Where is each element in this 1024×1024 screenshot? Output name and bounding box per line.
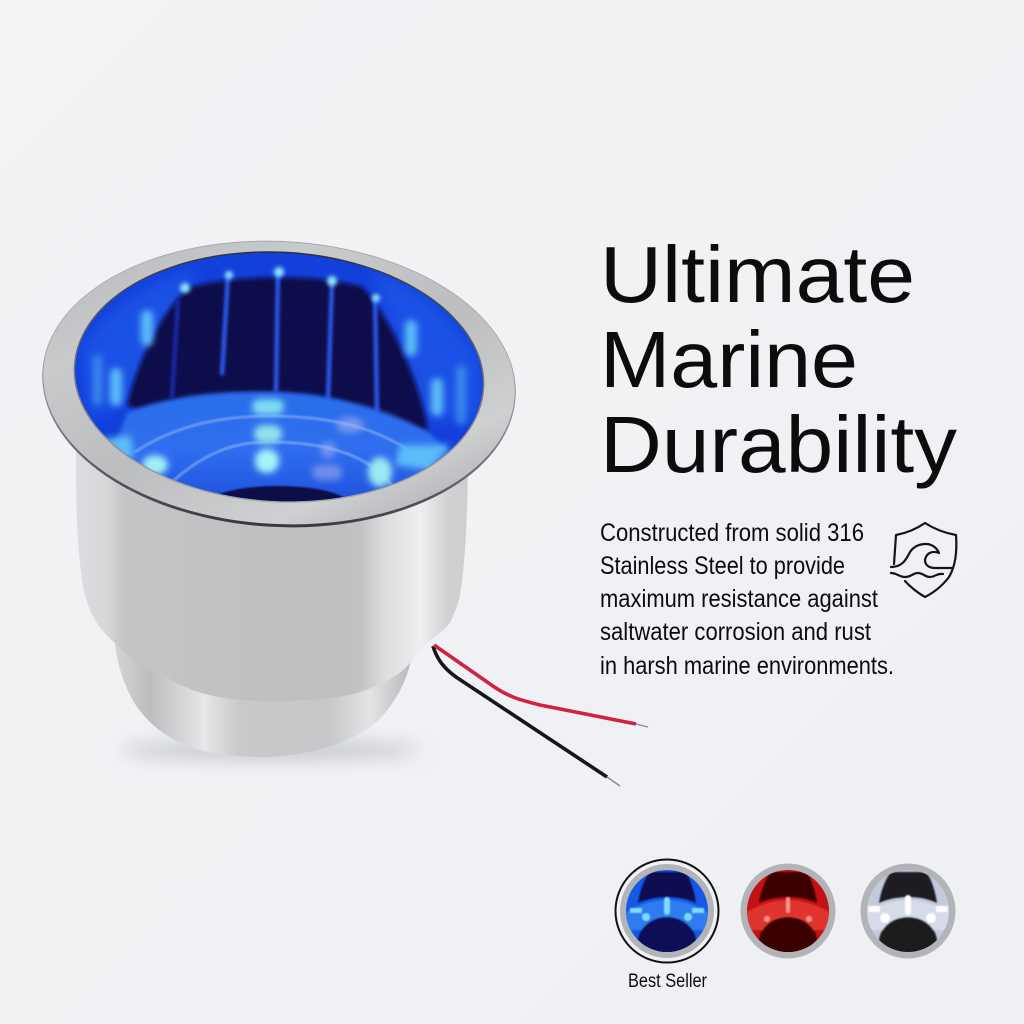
icon: shield with wave [891, 523, 956, 597]
infographic canvas [42, 240, 958, 987]
wire: red lead [434, 645, 648, 727]
LED glow spots [180, 267, 380, 302]
body copy: Constructed from solid 316 [600, 519, 864, 547]
body copy: maximum resistance against [600, 585, 878, 613]
heading: Durability [600, 400, 957, 489]
floor shadow [120, 741, 420, 759]
label: best seller: Best Seller [628, 971, 708, 992]
central drain [218, 485, 344, 502]
vertical LED streaks [172, 272, 377, 412]
product photo: LED cup holder [35, 229, 648, 786]
colour option: blue (selected) [616, 860, 718, 967]
body copy: saltwater corrosion and rust [600, 618, 871, 646]
body copy: in harsh marine environments. [600, 652, 894, 680]
stainless body [76, 450, 468, 701]
dark reflected well [127, 277, 428, 431]
stainless base section [115, 643, 411, 757]
light floor bands [105, 392, 470, 505]
wire: black lead [433, 646, 620, 786]
illuminated blue interior [75, 252, 483, 502]
outer side glow [81, 272, 192, 415]
colour option: white [860, 864, 956, 967]
rim outer flange [35, 229, 523, 539]
body copy: Stainless Steel to provide [600, 552, 845, 580]
body copy [600, 519, 894, 680]
heading: Marine [600, 315, 858, 404]
heading [600, 230, 957, 489]
heading: Ultimate [600, 230, 915, 319]
colour option: red [740, 864, 836, 967]
